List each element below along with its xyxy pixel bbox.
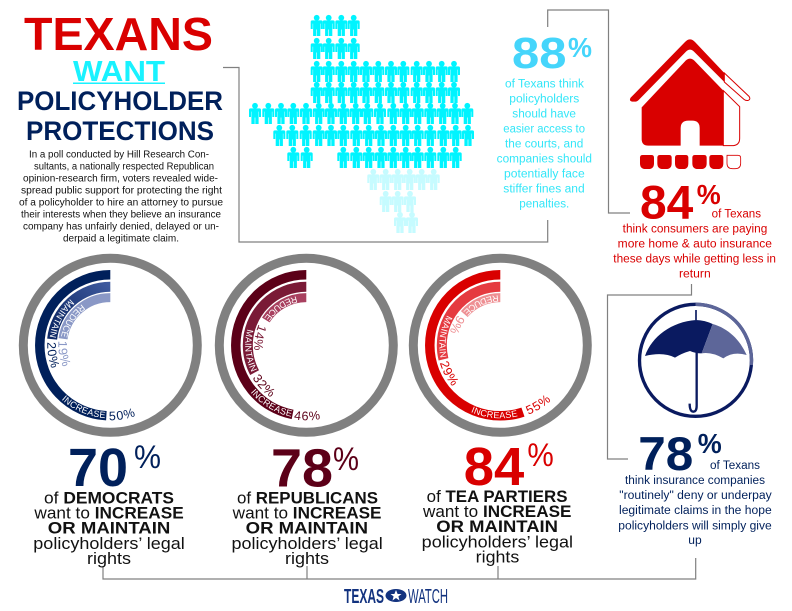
- stat: 84 percent of Texans: think consumers are paying: [623, 223, 767, 235]
- stat: 84 percent of Texans: these days while getting less in: [613, 253, 776, 265]
- stat: 78 percent of Texans: think insurance companies: [625, 475, 765, 487]
- stat: 88 percent: penalties.: [519, 198, 569, 210]
- stat: 78 percent of Republicans: %: [333, 441, 359, 477]
- stat: 88 percent: 88: [512, 29, 566, 78]
- stat: 70 percent of Democrats: [33, 438, 185, 568]
- stat: 78 percent of Republicans: want to INCREASE: [232, 504, 382, 522]
- intro text: derpaid a legitimate claim.: [63, 234, 179, 244]
- stat: 70 percent of Democrats: %: [134, 439, 161, 475]
- stat: 78 percent of Republicans: policyholders’ legal: [232, 535, 383, 553]
- Texas map of people icons: [249, 15, 474, 233]
- intro text: of a policyholder to hire an attorney to pursue: [19, 198, 223, 208]
- title: [17, 8, 223, 146]
- stat: 78 percent of Texans: "routinely" deny or underpay: [619, 490, 772, 502]
- chart: Democrats: INCREASE: [62, 395, 106, 418]
- stat: 84 percent of Tea Partiers: [422, 437, 573, 566]
- intro text: company has unfairly denied, delayed or un-: [23, 222, 219, 232]
- chart: Tea Partiers: 29%: [440, 361, 458, 386]
- stat: 88 percent: companies should: [497, 153, 592, 165]
- stat: 78 percent of Republicans: rights: [285, 550, 329, 568]
- intro text: opinion-research firm, voters revealed wide-: [23, 174, 218, 184]
- chart: Democrats: REDUCE: [61, 304, 86, 338]
- stat: 84 percent of Tea Partiers: policyholders’ legal: [422, 534, 573, 552]
- stat: 88 percent: %: [568, 32, 592, 63]
- logo: Texas Watch: TEXAS: [344, 586, 384, 608]
- stat: 84 percent of Texans: of Texans: [712, 208, 761, 220]
- chart: Republicans: 14%: [254, 324, 266, 350]
- chart: Republicans: MAINTAIN: [245, 330, 257, 372]
- stat: 78 percent of Republicans: 78: [271, 438, 333, 498]
- stat: 88 percent: policyholders: [509, 93, 580, 105]
- icon: umbrella: [639, 304, 752, 416]
- stat: 88 percent: of Texans think: [505, 78, 584, 90]
- stat: 84 percent of Texans: [613, 175, 776, 280]
- chart: Tea Partiers: MAINTAIN: [439, 316, 452, 358]
- stat: 88 percent: stiffer fines and: [503, 183, 585, 195]
- chart: Republicans: 32%: [253, 374, 274, 397]
- chart: Tea Partiers: 9%: [450, 316, 464, 333]
- stat: 78 percent of Republicans: OR MAINTAIN: [246, 519, 368, 537]
- chart: Republicans: [214, 254, 398, 437]
- stat: 88 percent: the courts, and: [505, 138, 583, 150]
- stat: 84 percent of Tea Partiers: %: [527, 437, 554, 473]
- stat: 70 percent of Democrats: 70: [68, 438, 128, 498]
- title: PROTECTIONS: [26, 116, 214, 146]
- stat: 70 percent of Democrats: want to INCREASE: [33, 504, 184, 522]
- stat: 84 percent of Tea Partiers: rights: [476, 548, 519, 566]
- intro text: their interests when they believe an insurance: [21, 210, 221, 220]
- chart: Democrats: MAINTAIN: [50, 299, 74, 338]
- stat: 84 percent of Texans: 84: [640, 175, 693, 228]
- title: POLICYHOLDER: [17, 86, 223, 116]
- chart: Democrats: 50%: [110, 408, 135, 420]
- stat: 78 percent of Texans: %: [698, 428, 722, 459]
- stat: 88 percent: [497, 29, 592, 210]
- title: TEXANS: [24, 8, 213, 60]
- intro text: sultants, a nationally respected Republican: [34, 162, 214, 172]
- icon: house: [630, 39, 750, 169]
- stat: 84 percent of Texans: return: [679, 268, 711, 280]
- stat: 78 percent of Republicans: [232, 438, 383, 568]
- stat: 78 percent of Texans: legitimate claims in the hope: [619, 505, 772, 517]
- chart: Democrats: 19%: [58, 342, 70, 366]
- chart: Republicans: 46%: [294, 410, 320, 420]
- stat: 84 percent of Tea Partiers: OR MAINTAIN: [436, 518, 558, 536]
- chart: Democrats: 20%: [47, 342, 59, 368]
- chart: Republicans: REDUCE: [264, 296, 298, 322]
- chart: Tea Partiers: [408, 254, 592, 437]
- stat: 88 percent: potentially face: [504, 168, 585, 180]
- stat: 70 percent of Democrats: policyholders’ legal: [33, 535, 185, 553]
- stat: 84 percent of Tea Partiers: 84: [464, 437, 524, 497]
- stat: 84 percent of Tea Partiers: want to INCREASE: [422, 503, 571, 521]
- logo: Texas Watch: [344, 586, 448, 608]
- stat: 88 percent: easier access to: [503, 123, 585, 135]
- stat: 84 percent of Texans: more home & auto insurance: [618, 238, 772, 250]
- title: WANT: [73, 56, 165, 88]
- chart: Republicans: INCREASE: [251, 388, 292, 417]
- chart: Tea Partiers: INCREASE: [472, 406, 518, 418]
- chart: Tea Partiers: 55%: [526, 395, 550, 414]
- stat: 78 percent of Texans: policyholders will simply give: [618, 520, 772, 532]
- stat: 78 percent of Texans: of Texans: [710, 460, 760, 472]
- intro text: In a poll conducted by Hill Research Con-: [29, 150, 209, 161]
- stat: 78 percent of Republicans: of REPUBLICANS: [237, 489, 378, 507]
- stat: 70 percent of Democrats: of DEMOCRATS: [44, 489, 174, 507]
- intro text: spread public support for protecting the right: [21, 186, 222, 196]
- stat: 88 percent: should have: [512, 108, 576, 120]
- stat: 78 percent of Texans: up: [688, 535, 702, 547]
- logo: Texas Watch: WATCH: [408, 586, 448, 608]
- chart: Democrats: [18, 254, 202, 437]
- stat: 70 percent of Democrats: rights: [87, 550, 131, 568]
- connector lines: [103, 10, 696, 579]
- stat: 84 percent of Tea Partiers: of TEA PARTIERS: [427, 488, 568, 506]
- stat: 70 percent of Democrats: OR MAINTAIN: [48, 519, 170, 537]
- stat: 84 percent of Texans: %: [697, 179, 721, 210]
- stat: 78 percent of Texans: [618, 427, 772, 547]
- intro text: [19, 150, 223, 244]
- chart: Tea Partiers: REDUCE: [464, 295, 498, 316]
- stat: 78 percent of Texans: 78: [638, 427, 693, 480]
